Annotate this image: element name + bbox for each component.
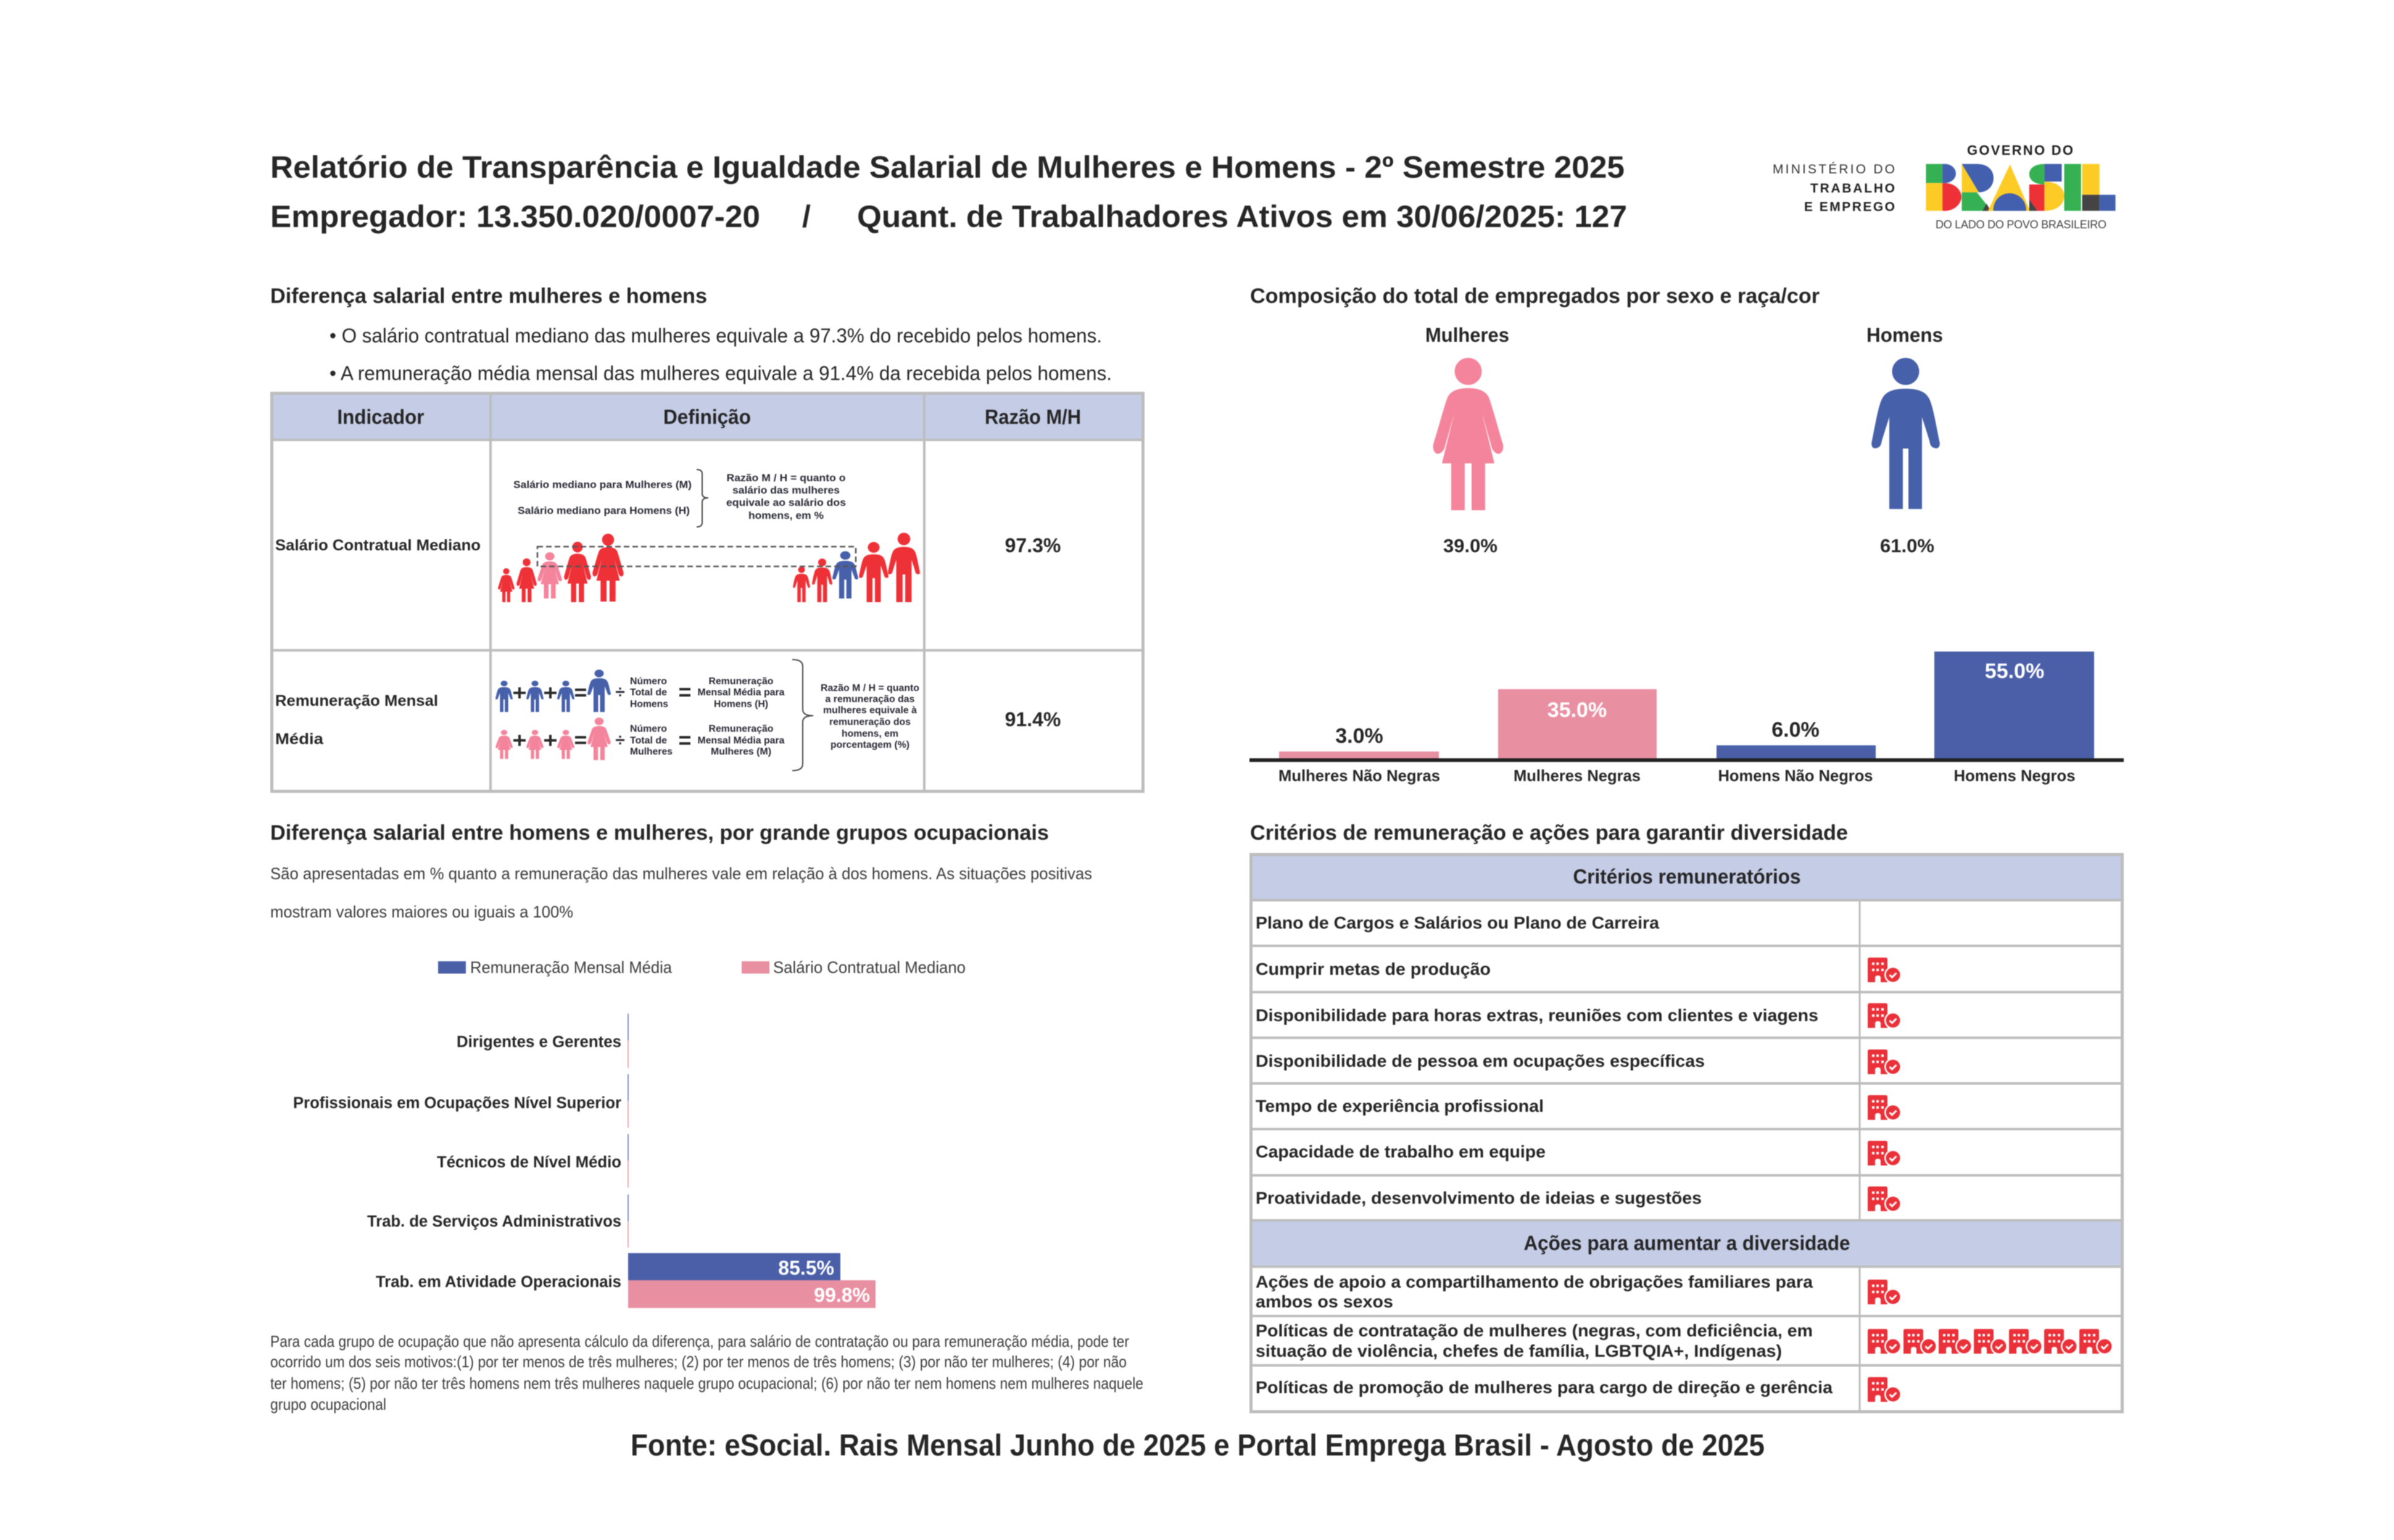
logo: Ministério do Trabalho e Emprego — [1773, 162, 1895, 214]
table: critérios remuneratórios e ações: Critérios remuneratórios — [1573, 865, 1800, 888]
diagram: salário mediano: Razão M / H = quanto o — [727, 472, 845, 484]
table: indicadores — [271, 394, 1143, 792]
bar chart: raça/cor: Mulheres Negras — [1514, 766, 1641, 785]
diagram: remuneração média: porcentagem (%) — [830, 740, 909, 750]
title: Quant. de Trabalhadores Ativos em 30/06/2025: 127 — [857, 199, 1627, 234]
table: critérios remuneratórios e ações: situação de violência, chefes de família, LGBTQIA+, Indígenas) — [1256, 1341, 1782, 1360]
table: critérios remuneratórios e ações: Capacidade de trabalho em equipe — [1256, 1142, 1546, 1161]
table: critérios remuneratórios e ações: Plano de Cargos e Salários ou Plano de Carreira — [1256, 913, 1659, 932]
table: critérios remuneratórios e ações: Políticas de promoção de mulheres para cargo de direção e gerência — [1256, 1378, 1833, 1397]
logo: Ministério do Trabalho e Emprego: TRABALHO — [1810, 181, 1895, 196]
description — [270, 864, 1092, 921]
panel: diferença salarial entre mulheres e homens — [270, 284, 1143, 792]
icon: mulheres 39%: 39.0% — [1443, 535, 1497, 557]
table: critérios remuneratórios e ações: Disponibilidade para horas extras, reuniões com clientes e viagens — [1256, 1006, 1818, 1025]
legend — [438, 958, 966, 977]
diagram: remuneração média: a remuneração das — [826, 694, 915, 705]
diagram: salário mediano — [498, 470, 920, 602]
diagram: remuneração média: homens, em — [842, 729, 898, 739]
bar chart: raça/cor: 3.0% — [1335, 724, 1383, 748]
bar chart: raça/cor: 55.0% — [1985, 660, 2044, 683]
bar chart: grupos ocupacionais: Trab. em Atividade Operacionais — [376, 1273, 621, 1291]
diagram: remuneração média: Razão M / H = quanto — [821, 683, 919, 693]
bar chart: raça/cor — [1249, 652, 2124, 785]
panel: diferença salarial por grupos ocupacionais — [270, 821, 1143, 1414]
diagram: remuneração média: Mulheres (M) — [711, 747, 771, 757]
bullet: salário contratual: • O salário contratual mediano das mulheres equivale a 97.3% do recebido pelos homens. — [329, 325, 1102, 347]
diagram: remuneração média: Mensal Média para — [697, 735, 785, 746]
title — [270, 150, 1627, 234]
diagram: salário mediano: equivale ao salário dos — [726, 497, 846, 508]
diagram: remuneração média: ÷ — [615, 731, 625, 750]
diagram: salário mediano: homens, em % — [748, 510, 824, 521]
diagram: remuneração média: Total de — [630, 735, 667, 746]
table: critérios remuneratórios e ações: Cumprir metas de produção — [1256, 959, 1491, 979]
bar chart: grupos ocupacionais: 99.8% — [814, 1284, 870, 1306]
description: São apresentadas em % quanto a remuneração das mulheres vale em relação à dos homens. As situações positivas — [270, 864, 1092, 883]
legend: Salário Contratual Mediano — [773, 958, 966, 977]
table: indicadores: 97.3% — [1005, 534, 1061, 557]
diagram: salário mediano: salário das mulheres — [732, 484, 840, 496]
table: indicadores: Definição — [663, 405, 751, 428]
diagram: remuneração média: Homens (H) — [714, 699, 768, 710]
diagram: remuneração média: remuneração dos — [829, 717, 911, 727]
logo: Governo do Brasil: GOVERNO DO — [1967, 143, 2073, 158]
table: critérios remuneratórios e ações: Proatividade, desenvolvimento de ideias e sugestões — [1256, 1188, 1702, 1207]
legend: Remuneração Mensal Média — [470, 958, 672, 977]
panel: composição do total de empregados — [1249, 284, 2124, 785]
heading: Diferença salarial entre homens e mulheres, por grande grupos ocupacionais — [270, 821, 1049, 845]
title: / — [802, 199, 811, 234]
title: Relatório de Transparência e Igualdade Salarial de Mulheres e Homens - 2º Semestre 2025 — [270, 150, 1625, 184]
diagram: remuneração média: Total de — [630, 687, 667, 698]
heading: Composição do total de empregados por sexo e raça/cor — [1250, 284, 1820, 308]
diagram: salário mediano: Salário mediano para Homens (H) — [518, 505, 690, 516]
icon: homens 61% — [1866, 324, 1943, 557]
heading: Diferença salarial entre mulheres e homens — [270, 284, 707, 308]
table: critérios remuneratórios e ações: Ações de apoio a compartilhamento de obrigações familiares para — [1256, 1272, 1813, 1291]
icon: mulheres 39% — [1425, 324, 1509, 557]
icon: mulheres 39%: Mulheres — [1425, 324, 1509, 346]
bar chart: grupos ocupacionais — [293, 1014, 876, 1308]
bar chart: raça/cor: Homens Negros — [1953, 766, 2076, 785]
table: indicadores: Indicador — [337, 405, 425, 428]
bar chart: grupos ocupacionais: Dirigentes e Gerentes — [457, 1033, 621, 1051]
logo: Governo do Brasil — [1926, 143, 2116, 231]
table: indicadores: Média — [275, 731, 324, 748]
bar chart: grupos ocupacionais: Técnicos de Nível Médio — [437, 1154, 621, 1171]
bar chart: raça/cor: Mulheres Não Negras — [1278, 766, 1440, 785]
diagram: remuneração média: Mulheres — [630, 747, 673, 757]
bar chart: grupos ocupacionais: Profissionais em Ocupações Nível Superior — [293, 1095, 621, 1112]
title: Empregador: 13.350.020/0007-20 — [270, 199, 760, 234]
diagram: remuneração média: Remuneração — [708, 724, 774, 734]
bar chart: grupos ocupacionais: Trab. de Serviços Administrativos — [367, 1213, 621, 1230]
logo: Ministério do Trabalho e Emprego: MINISTÉRIO DO — [1773, 162, 1895, 176]
table: critérios remuneratórios e ações: Ações para aumentar a diversidade — [1524, 1232, 1850, 1254]
icon: homens 61%: 61.0% — [1880, 535, 1934, 557]
table: critérios remuneratórios e ações: Disponibilidade de pessoa em ocupações específicas — [1256, 1051, 1705, 1070]
diagram: remuneração média: Número — [630, 724, 667, 734]
diagram: remuneração média: Homens — [630, 699, 668, 710]
icons: empresa com verificação — [1868, 958, 2113, 1403]
footnote: Para cada grupo de ocupação que não apresenta cálculo da diferença, para salário de contratação ou para remuneração média, pode ter — [270, 1332, 1129, 1351]
source footer: Fonte: eSocial. Rais Mensal Junho de 2025 e Portal Emprega Brasil - Agosto de 2025 — [631, 1429, 1765, 1462]
diagram: remuneração média: Número — [630, 676, 667, 687]
logo: Governo do Brasil: DO LADO DO POVO BRASILEIRO — [1936, 218, 2106, 231]
footnote: ter homens; (5) por não ter três homens nem três mulheres naquele grupo ocupacional; (6) por não ter nem homens nem mulheres naquele — [270, 1374, 1143, 1393]
logo: Ministério do Trabalho e Emprego: E EMPREGO — [1804, 200, 1895, 214]
diagram: remuneração média — [495, 660, 919, 771]
diagram: remuneração média: mulheres equivale à — [823, 705, 917, 716]
bar chart: grupos ocupacionais: 85.5% — [778, 1257, 834, 1279]
diagram: remuneração média: Mensal Média para — [697, 687, 785, 698]
table: critérios remuneratórios e ações: Políticas de contratação de mulheres (negras, com deficiência, em — [1256, 1321, 1813, 1340]
diagram: remuneração média: Remuneração — [708, 676, 774, 687]
heading: Critérios de remuneração e ações para garantir diversidade — [1250, 821, 1848, 845]
diagram: salário mediano: Salário mediano para Mulheres (M) — [513, 479, 692, 491]
table: indicadores: Razão M/H — [985, 405, 1081, 428]
table: critérios remuneratórios e ações: Tempo de experiência profissional — [1256, 1096, 1544, 1116]
panel: critérios de remuneração e ações — [1250, 821, 2123, 1412]
table: indicadores: Remuneração Mensal — [275, 692, 438, 710]
table: critérios remuneratórios e ações: ambos os sexos — [1256, 1292, 1393, 1311]
logo letters: Brasil — [1926, 164, 2116, 211]
bar chart: raça/cor: 6.0% — [1771, 718, 1820, 742]
icon: homens 61%: Homens — [1866, 324, 1943, 346]
bar chart: raça/cor: Homens Não Negros — [1718, 766, 1873, 785]
footnote: ocorrido um dos seis motivos:(1) por ter menos de três mulheres; (2) por ter menos de três homens; (3) por não ter mulheres; (4) por não — [270, 1352, 1127, 1371]
table: critérios remuneratórios e ações — [1251, 855, 2123, 1412]
table: indicadores: 91.4% — [1005, 708, 1061, 731]
diagram: remuneração média: ÷ — [615, 682, 625, 702]
footnote: grupo ocupacional — [270, 1395, 386, 1414]
table: indicadores: Salário Contratual Mediano — [275, 537, 481, 554]
bar chart: raça/cor: 35.0% — [1547, 698, 1607, 722]
description: mostram valores maiores ou iguais a 100% — [270, 903, 573, 921]
bullet: remuneração média: • A remuneração média mensal das mulheres equivale a 91.4% da recebida pelos homens. — [329, 362, 1112, 384]
footnote — [270, 1332, 1143, 1414]
